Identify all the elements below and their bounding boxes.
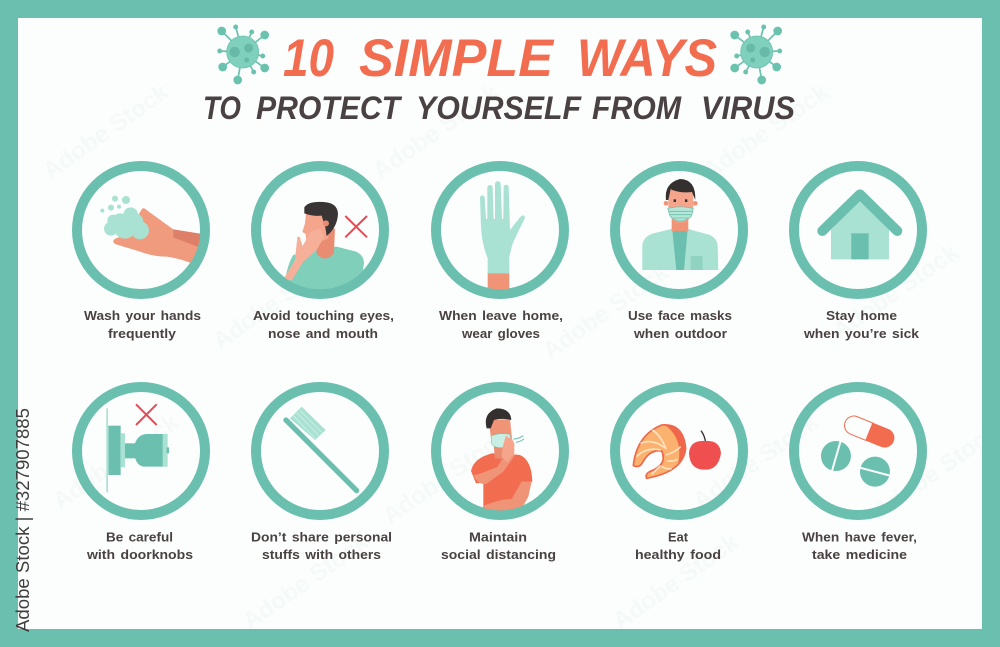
text: Adobe Stock xyxy=(868,418,1000,525)
label: Be careful xyxy=(106,530,173,544)
label: When have fever, xyxy=(802,530,917,544)
label xyxy=(635,530,721,562)
icon: toothbrush xyxy=(286,407,357,491)
panel: doorknobs xyxy=(77,387,205,562)
panel: medicine xyxy=(794,387,922,562)
icon: virus right xyxy=(731,25,781,83)
icon: house xyxy=(822,194,897,259)
text: Adobe Stock xyxy=(608,528,744,635)
label: when you’re sick xyxy=(803,326,920,341)
subtitle: PROTECT xyxy=(256,90,402,126)
text: Adobe Stock xyxy=(378,423,514,530)
panel: avoid touching face xyxy=(253,166,394,341)
label xyxy=(251,530,392,562)
icon: doorknob xyxy=(106,404,169,492)
text: Adobe Stock xyxy=(238,528,374,635)
subtitle: FROM xyxy=(592,90,682,126)
label: Wash your hands xyxy=(84,308,201,323)
title xyxy=(283,29,717,88)
label: stuffs with others xyxy=(262,547,381,562)
label xyxy=(439,308,563,341)
text: Adobe Stock xyxy=(698,78,834,185)
text: Adobe Stock xyxy=(38,78,174,185)
label xyxy=(253,308,394,341)
label: nose and mouth xyxy=(268,326,378,341)
label: social distancing xyxy=(441,547,556,562)
text: Adobe Stock xyxy=(538,258,674,365)
label xyxy=(802,530,917,562)
icon: man touching face xyxy=(283,202,367,290)
title: SIMPLE xyxy=(359,29,555,88)
stock id text: Adobe Stock | #327907885 xyxy=(13,408,33,632)
label: Eat xyxy=(668,530,689,544)
text: Adobe Stock xyxy=(48,408,184,515)
panel: wash hands xyxy=(77,166,205,341)
panel: face mask xyxy=(615,166,743,341)
text: Adobe Stock xyxy=(208,248,344,355)
icon: salmon and apple xyxy=(633,425,721,478)
label: Use face masks xyxy=(628,308,732,323)
subtitle: TO xyxy=(203,90,241,126)
label: healthy food xyxy=(635,547,721,562)
label: Stay home xyxy=(826,308,897,323)
panel: toothbrush xyxy=(251,387,392,562)
title: 10 xyxy=(283,29,334,88)
label: Maintain xyxy=(469,530,527,544)
subtitle: VIRUS xyxy=(701,90,796,126)
icon: soapy hand xyxy=(100,196,202,265)
subtitle xyxy=(203,90,796,126)
title: WAYS xyxy=(577,29,717,88)
text: Adobe Stock xyxy=(688,408,824,515)
label: take medicine xyxy=(812,547,907,562)
icon: sneezing man xyxy=(471,408,532,515)
panel: social distancing xyxy=(436,387,564,562)
panel: gloves xyxy=(436,166,564,341)
icon: glove xyxy=(480,181,525,289)
label xyxy=(441,530,556,562)
label xyxy=(86,530,193,562)
label: When leave home, xyxy=(439,308,563,323)
text: Adobe Stock xyxy=(368,78,504,185)
icon: pills xyxy=(821,413,897,487)
label: Avoid touching eyes, xyxy=(253,308,394,323)
label: Don’t share personal xyxy=(251,530,392,544)
label: wear gloves xyxy=(461,326,540,341)
label xyxy=(628,308,732,341)
panel: stay home xyxy=(794,166,922,341)
label: with doorknobs xyxy=(86,547,193,562)
subtitle: YOURSELF xyxy=(416,90,582,126)
text: Adobe Stock xyxy=(828,238,964,345)
label: when outdoor xyxy=(633,326,727,341)
label xyxy=(803,308,920,341)
label xyxy=(84,308,201,341)
icon: virus left xyxy=(218,25,268,83)
panel: healthy food xyxy=(615,387,743,562)
icon: man with mask xyxy=(642,179,718,270)
label: frequently xyxy=(108,326,177,341)
